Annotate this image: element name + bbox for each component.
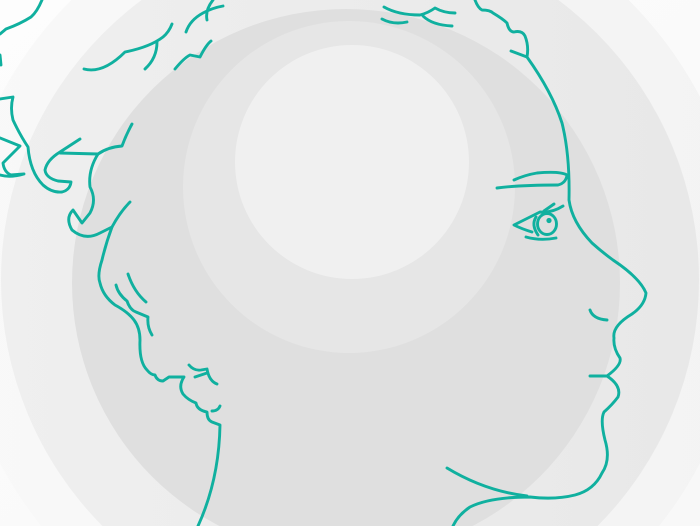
face profile bbox=[453, 0, 646, 526]
top hair strokes bbox=[0, 0, 455, 70]
eye bbox=[514, 204, 563, 239]
lips bbox=[590, 375, 607, 377]
jaw bbox=[447, 468, 527, 496]
back of neck and ear bbox=[99, 227, 220, 526]
side hair curls bbox=[0, 97, 132, 236]
hairline tick bbox=[511, 51, 527, 57]
eyebrow bbox=[497, 172, 567, 188]
nostril bbox=[590, 310, 607, 320]
neck hair curls bbox=[189, 365, 220, 411]
ear lines bbox=[116, 285, 152, 335]
